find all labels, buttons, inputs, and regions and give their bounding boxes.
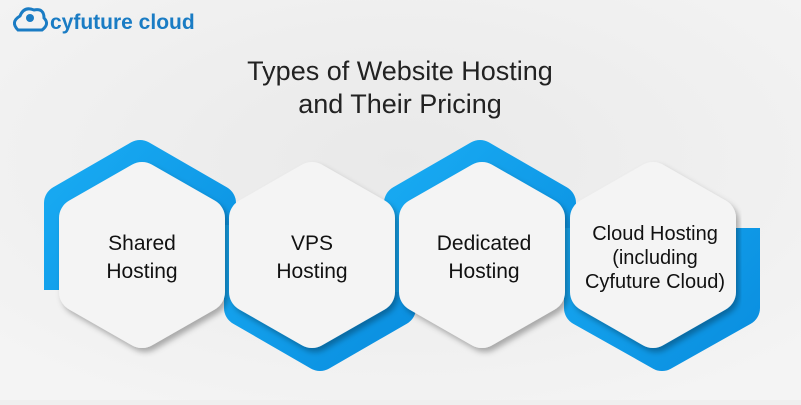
hexagon: VPS Hosting: Hosting — [276, 260, 348, 283]
hexagon: Dedicated Hosting: Dedicated — [437, 232, 531, 255]
hexagon: Dedicated Hosting — [419, 182, 545, 328]
hexagon: VPS Hosting — [249, 182, 375, 328]
blue hexagon accents — [62, 158, 742, 353]
hexagon: Cloud Hosting: Cloud Hosting — [592, 223, 718, 245]
hexagon: Cloud Hosting: Cyfuture Cloud) — [585, 271, 725, 293]
hexagon: Shared Hosting — [79, 182, 205, 328]
hexagon: VPS Hosting: VPS — [291, 232, 333, 255]
hexagon: Dedicated Hosting: Hosting — [448, 260, 520, 283]
title: and Their Pricing — [298, 89, 502, 119]
logo: cyfuture cloud — [50, 11, 195, 34]
hexagon: Shared Hosting: Shared — [108, 232, 176, 255]
hexagon: Cloud Hosting — [585, 182, 725, 328]
hexagon: Shared Hosting: Hosting — [106, 260, 178, 283]
title — [247, 56, 553, 119]
hexagon: Cloud Hosting: (including — [612, 247, 698, 269]
title: Types of Website Hosting — [247, 56, 553, 86]
